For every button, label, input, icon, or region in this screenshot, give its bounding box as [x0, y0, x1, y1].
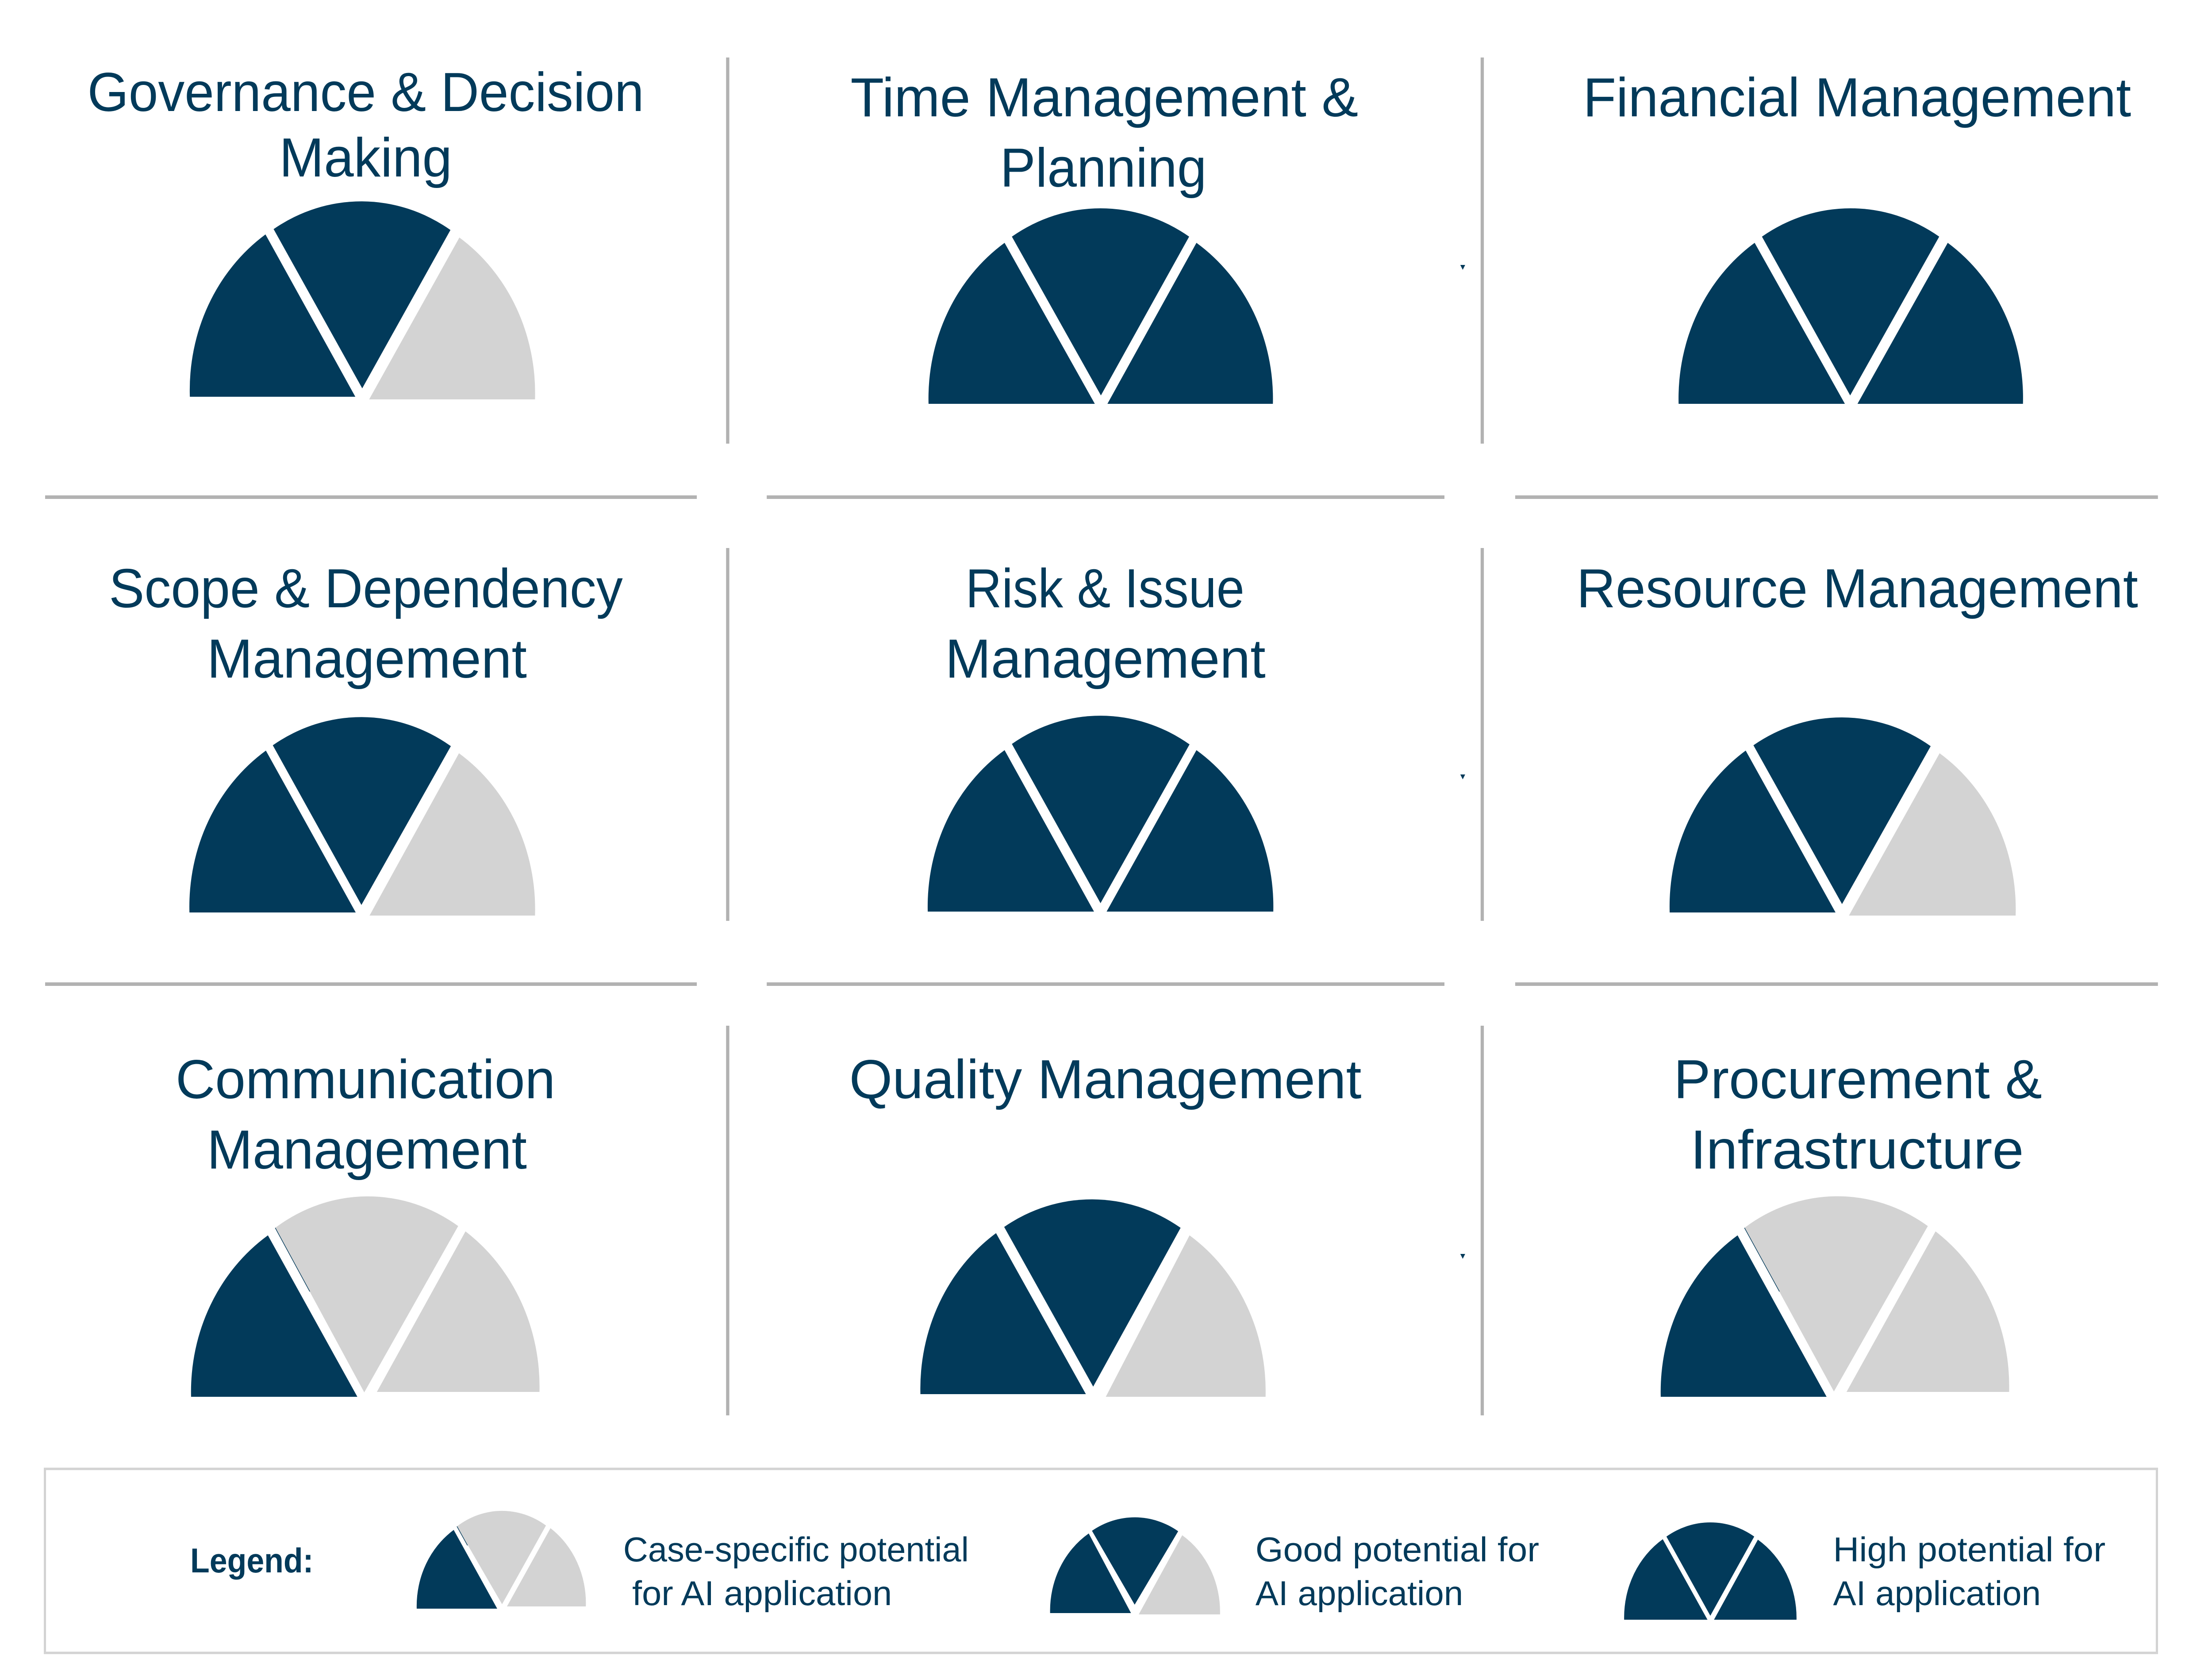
legend heading: Legend:	[190, 1541, 314, 1580]
gauge: high potential	[928, 716, 1273, 912]
panel: Time Management & Planning	[850, 67, 1358, 404]
heading: Communication Management: Communication	[176, 1049, 555, 1110]
heading: Risk & Issue Management	[945, 558, 1266, 690]
icon: small marker triangle row 1	[1460, 265, 1465, 270]
panel: Resource Management	[1577, 558, 2138, 916]
gauge: good potential	[190, 201, 535, 399]
heading: Time Management & Planning: Time Management &	[850, 67, 1358, 128]
heading: Financial Management: Financial Management	[1583, 67, 2131, 128]
gauge: high potential	[929, 208, 1273, 404]
heading: Quality Management: Quality Management	[849, 1049, 1362, 1110]
heading: Risk & Issue Management: Management	[945, 629, 1266, 690]
gauge: case-specific potential	[191, 1196, 540, 1397]
gauge: case-specific potential	[1661, 1196, 2009, 1397]
icon: small marker triangle row 3	[1460, 1254, 1465, 1259]
legend item: good potential	[1050, 1518, 1539, 1614]
heading: Governance & Decision Making: Governance & Decision	[88, 62, 644, 123]
legend text: case-specific: Case-specific potential	[623, 1530, 969, 1569]
legend text: good	[1256, 1530, 1539, 1613]
panel: Scope & Dependency Management	[109, 558, 623, 916]
heading: Procurement & Infrastructure: Infrastructure	[1690, 1119, 2024, 1181]
heading: Scope & Dependency Management	[109, 558, 623, 690]
legend gauge: high	[1624, 1522, 1797, 1620]
heading: Procurement & Infrastructure: Procurement &	[1674, 1049, 2042, 1110]
heading: Scope & Dependency Management: Management	[207, 629, 527, 690]
panel: Communication Management	[176, 1049, 555, 1397]
legend text: case-specific	[623, 1530, 969, 1613]
heading: Governance & Decision Making: Making	[279, 127, 452, 188]
heading: Time Management & Planning: Planning	[1000, 138, 1206, 199]
legend text: good: AI application	[1256, 1574, 1463, 1613]
panel: Financial Management	[1583, 67, 2131, 404]
panel: Risk & Issue Management	[928, 558, 1273, 912]
legend item: high potential	[1624, 1522, 2105, 1620]
heading: Governance & Decision Making	[88, 62, 644, 188]
heading: Scope & Dependency Management: Scope & Dependency	[109, 558, 623, 619]
gauge: high potential	[1678, 208, 2023, 404]
heading: Communication Management	[176, 1049, 555, 1181]
legend text: good: Good potential for	[1256, 1530, 1539, 1569]
gauge: good potential	[1670, 717, 2016, 916]
legend text: high: AI application	[1833, 1574, 2041, 1613]
panel: Quality Management	[849, 1049, 1362, 1397]
heading: Time Management & Planning	[850, 67, 1358, 199]
heading: Risk & Issue Management: Risk & Issue	[966, 558, 1244, 619]
panel: Procurement & Infrastructure	[1661, 1049, 2042, 1397]
legend frame	[45, 1469, 2157, 1653]
icon: small marker triangle row 2	[1460, 774, 1465, 779]
legend item: case-specific potential	[417, 1511, 969, 1613]
heading: Communication Management: Management	[207, 1119, 527, 1181]
gauge: good potential	[189, 717, 535, 916]
heading: Procurement & Infrastructure	[1674, 1049, 2042, 1181]
legend text: high	[1833, 1530, 2105, 1613]
legend gauge: case-specific	[417, 1511, 586, 1609]
panel: legend	[45, 1469, 2157, 1653]
legend gauge: good	[1050, 1518, 1220, 1614]
legend text: case-specific: for AI application	[632, 1574, 892, 1613]
legend text: high: High potential for	[1833, 1530, 2105, 1569]
panel: Governance & Decision Making	[88, 62, 644, 399]
gauge: good potential	[920, 1200, 1266, 1397]
heading: Resource Management: Resource Management	[1577, 558, 2138, 619]
